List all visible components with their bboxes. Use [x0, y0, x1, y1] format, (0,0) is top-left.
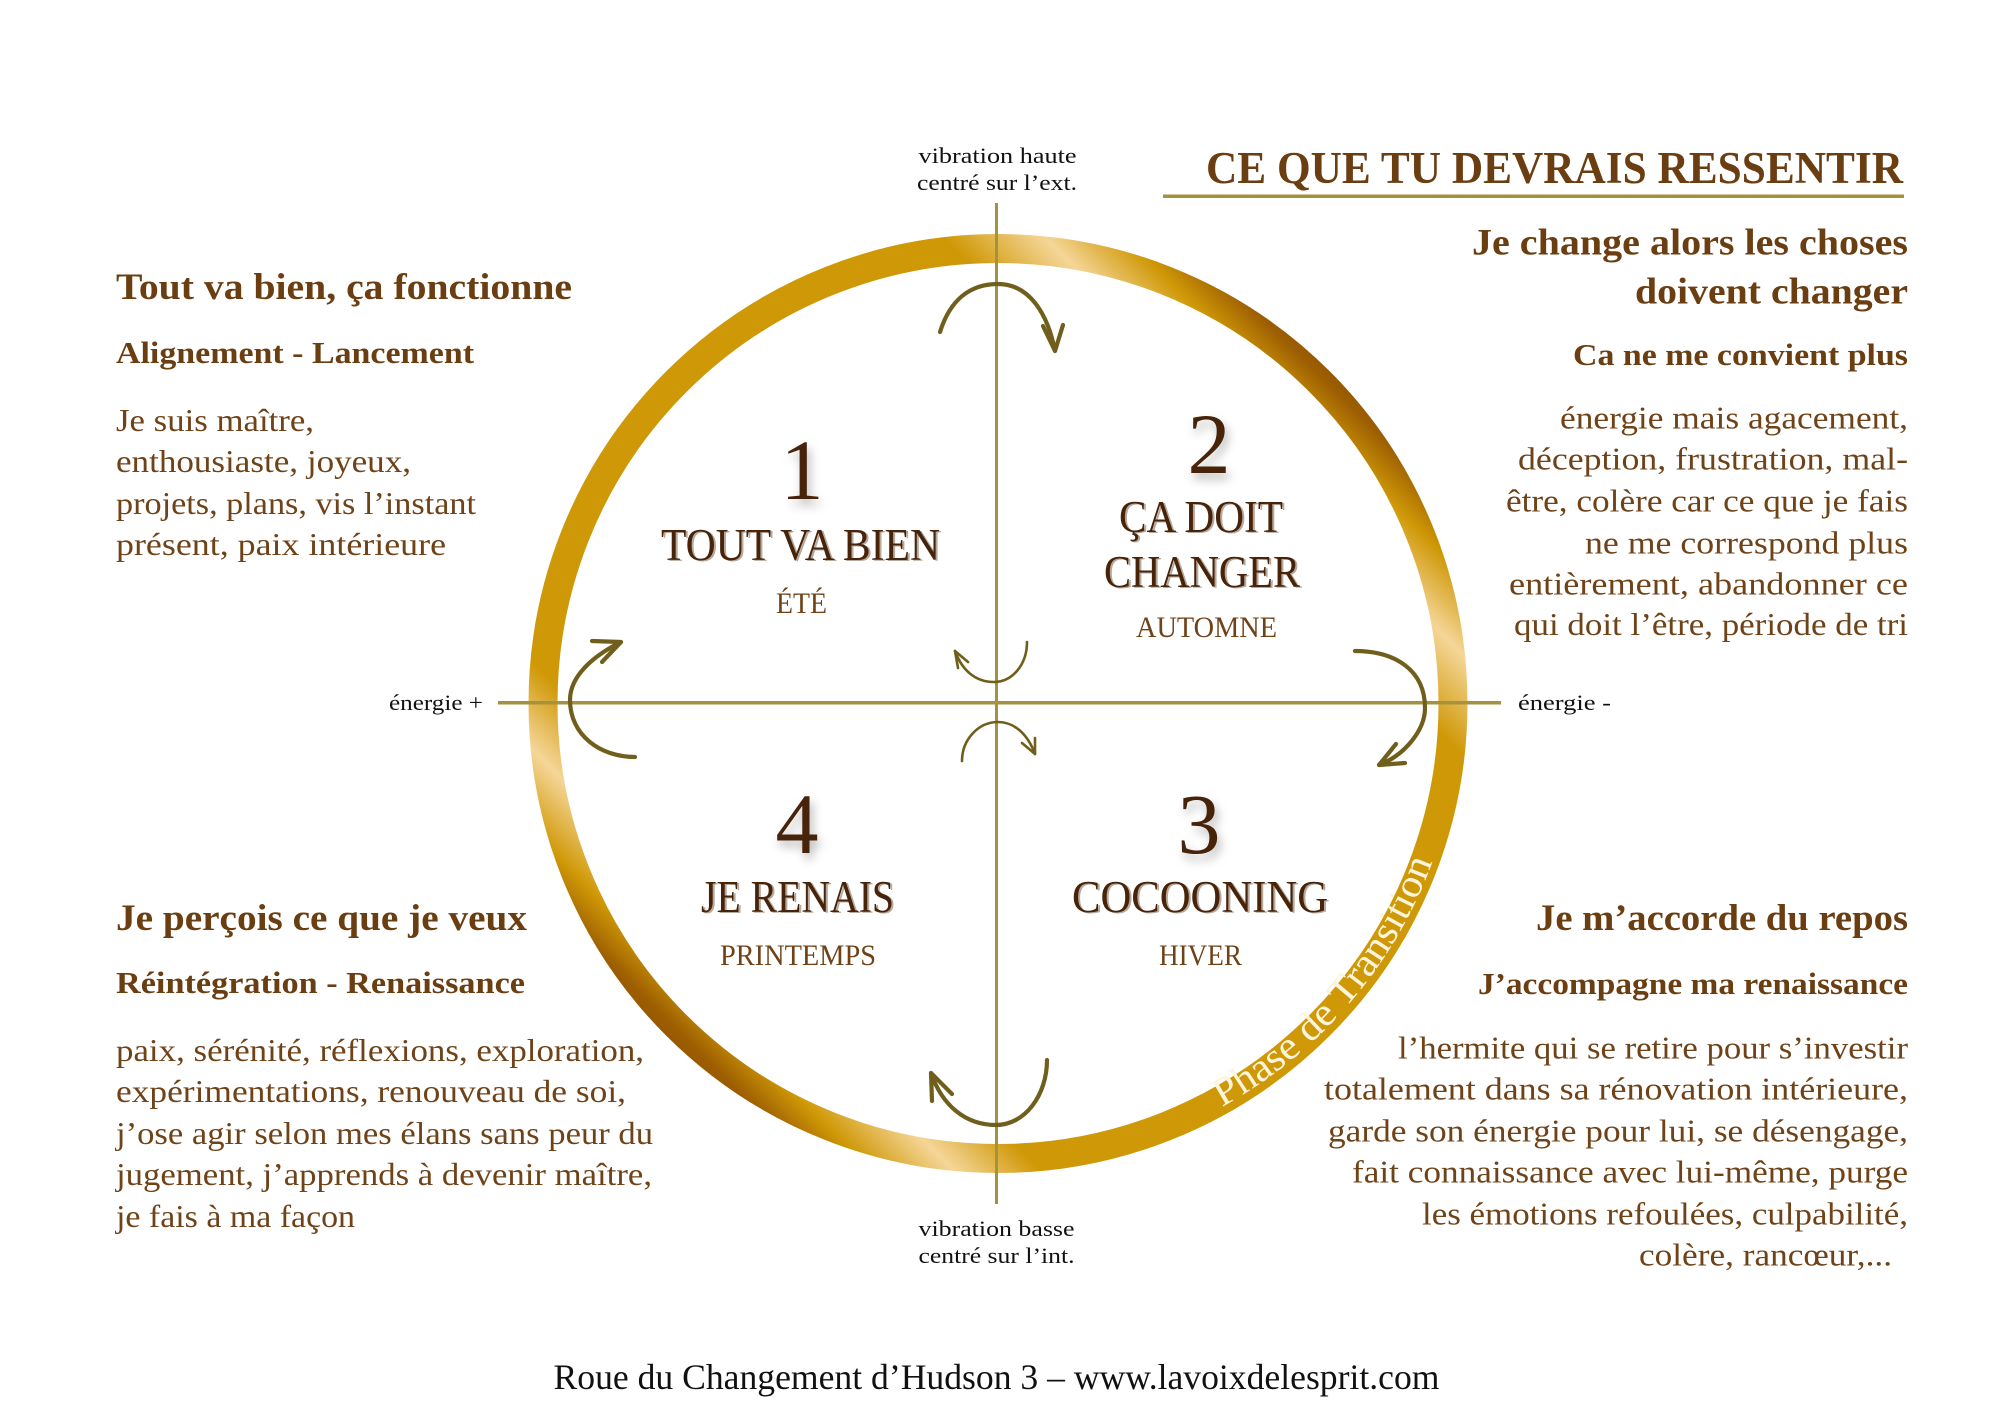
quadrant 1 label	[661, 422, 940, 620]
arrow: top	[940, 284, 1063, 351]
quadrant 3 label	[1072, 776, 1328, 972]
arrow: small centre upper	[955, 642, 1027, 682]
axis label: vibration haute: centré sur l’ext.	[917, 170, 1077, 195]
text block: quadrant 1	[116, 267, 572, 562]
block 2 heading: doivent changer	[1635, 272, 1908, 312]
block 1 body: projets, plans, vis l’instant	[116, 485, 476, 521]
block 2 subheading: Ca ne me convient plus	[1573, 337, 1908, 372]
block 3 heading: Je m’accorde du repos	[1536, 898, 1908, 939]
quadrant 2 title: CHANGER	[1104, 547, 1300, 597]
block 4 body: expérimentations, renouveau de soi,	[116, 1073, 626, 1109]
block 3 body: les émotions refoulées, culpabilité,	[1422, 1196, 1908, 1232]
text block: quadrant 4	[115, 898, 653, 1234]
block 4 subheading: Réintégration - Renaissance	[116, 965, 525, 1000]
axis label: vibration basse	[918, 1216, 1074, 1268]
block 3 body: fait connaissance avec lui-même, purge	[1352, 1154, 1908, 1190]
axis label: vibration haute	[917, 143, 1077, 195]
block 3 body: garde son énergie pour lui, se désengage,	[1328, 1112, 1908, 1148]
arrow: right	[1355, 651, 1425, 765]
axis label: vibration basse: centré sur l’int.	[918, 1243, 1074, 1268]
quadrant 2 label	[1104, 396, 1300, 644]
arrow: left	[570, 641, 635, 757]
block 1 heading: Tout va bien, ça fonctionne	[116, 267, 572, 308]
vertical axis	[995, 203, 998, 1204]
block 1 body	[116, 402, 476, 562]
block 3 body	[1324, 1030, 1908, 1272]
ring label: Phase de Transition: Phase de Transition	[1210, 859, 1432, 1106]
axis label: vibration haute: vibration haute	[918, 143, 1076, 168]
block 2 heading	[1472, 222, 1908, 312]
season: hiver: HIVER	[1159, 939, 1242, 972]
block 4 body	[115, 1032, 653, 1234]
block 4 body: paix, sérénité, réflexions, exploration,	[116, 1032, 644, 1068]
block 2 body: énergie mais agacement,	[1560, 400, 1908, 436]
block 3 body: l’hermite qui se retire pour s’investir	[1398, 1030, 1908, 1066]
season: été: ÉTÉ	[776, 587, 827, 620]
block 2 body: qui doit l’être, période de tri	[1514, 606, 1908, 642]
block 1 body: enthousiaste, joyeux,	[116, 443, 411, 479]
block 2 body	[1506, 400, 1908, 642]
block 4 heading: Je perçois ce que je veux	[116, 898, 528, 939]
axis label: vibration basse: vibration basse	[918, 1216, 1074, 1241]
block 3 body: totalement dans sa rénovation intérieure,	[1324, 1070, 1908, 1106]
season: printemps: PRINTEMPS	[720, 939, 876, 972]
axis label: énergie moins: énergie -	[1518, 690, 1611, 715]
season: automne: AUTOMNE	[1136, 611, 1277, 644]
number 1: 1	[780, 422, 824, 518]
block 1 subheading: Alignement - Lancement	[116, 335, 475, 370]
axis label: énergie plus: énergie +	[389, 690, 483, 715]
block 4 body: je fais à ma façon	[115, 1198, 355, 1234]
block 2 body: ne me correspond plus	[1585, 524, 1908, 560]
arrow: small centre lower	[962, 722, 1035, 761]
number 4: 4	[776, 776, 818, 872]
block 2 body: déception, frustration, mal-	[1518, 440, 1908, 476]
number 2: 2	[1188, 396, 1230, 492]
footer credit: Roue du Changement d’Hudson 3 – www.lavoixdelesprit.com	[554, 1357, 1440, 1397]
quadrant 4 title: JE RENAIS	[701, 872, 894, 922]
block 3 subheading: J’accompagne ma renaissance	[1478, 966, 1908, 1001]
heading: ce que tu devrais ressentir: CE QUE TU DEVRAIS RESSENTIR	[1206, 143, 1903, 193]
block 2 body: être, colère car ce que je fais	[1506, 482, 1908, 518]
number 3: 3	[1178, 776, 1220, 872]
arrow: bottom	[931, 1060, 1047, 1125]
block 2 heading: Je change alors les choses	[1472, 222, 1908, 264]
quadrant 2 title: ÇA DOIT	[1119, 492, 1283, 542]
quadrant 4 label	[701, 776, 894, 972]
text block: quadrant 2	[1472, 222, 1908, 642]
text block: quadrant 3	[1324, 898, 1908, 1272]
block 3 body: colère, rancœur,...	[1639, 1236, 1892, 1272]
block 2 body: entièrement, abandonner ce	[1509, 566, 1908, 602]
horizontal axis	[498, 701, 1501, 704]
block 1 body: Je suis maître,	[116, 402, 314, 438]
block 4 body: jugement, j’apprends à devenir maître,	[115, 1156, 652, 1192]
block 4 body: j’ose agir selon mes élans sans peur du	[115, 1115, 653, 1151]
quadrant 2 title	[1104, 492, 1300, 597]
heading underline	[1163, 194, 1904, 198]
quadrant 1 title: TOUT VA BIEN	[661, 520, 940, 570]
gold wheel ring	[543, 248, 1453, 1158]
quadrant 3 title: COCOONING	[1072, 872, 1328, 922]
block 1 body: présent, paix intérieure	[116, 526, 446, 562]
